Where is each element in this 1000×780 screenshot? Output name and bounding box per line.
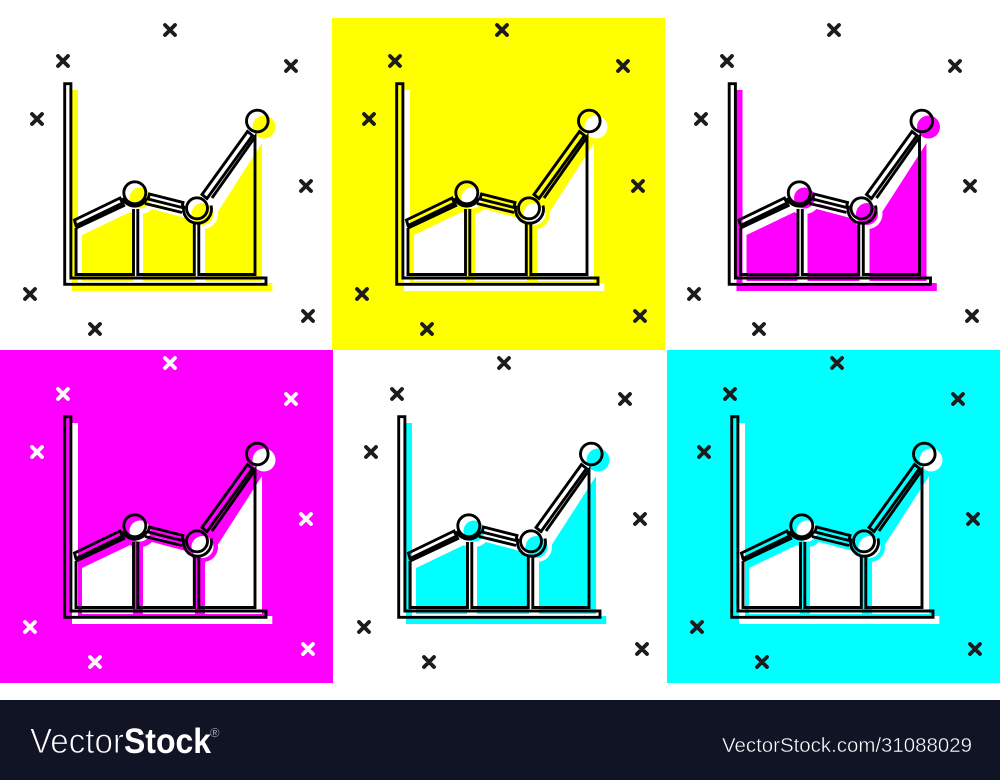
- scattered cross marks: panel 1: [25, 25, 313, 334]
- panel: white background with cyan chart: [333, 350, 667, 683]
- chart icon: cyan accent: [399, 417, 610, 624]
- scattered cross marks: panel 5: [359, 358, 647, 667]
- scattered cross marks: panel 2: [357, 25, 645, 334]
- logo: VectorStock: Stock: [124, 722, 211, 761]
- panel: magenta background with white chart: [0, 350, 333, 683]
- panel: white background with yellow chart: [0, 0, 332, 350]
- chart icon: magenta accent: [729, 84, 940, 291]
- logo: VectorStock: ®: [210, 725, 220, 740]
- panel: yellow background with white chart: [332, 18, 665, 350]
- logo: VectorStock: [30, 722, 220, 761]
- panel: white background with magenta chart: [665, 0, 1000, 350]
- chart icon: yellow accent: [65, 84, 276, 291]
- chart icon: white accent: [397, 84, 608, 291]
- scattered cross marks: panel 6: [692, 358, 980, 667]
- chart icon: white accent on magenta: [65, 417, 276, 624]
- image id text: VectorStock.com/31088029: [722, 735, 972, 757]
- scattered cross marks: panel 4: [25, 358, 313, 667]
- scattered cross marks: panel 3: [689, 25, 977, 334]
- logo: VectorStock: Vector: [30, 722, 124, 761]
- footer bar: [0, 700, 1000, 780]
- panel: cyan background with white chart: [667, 350, 1000, 683]
- chart icon: white accent on cyan: [732, 417, 942, 624]
